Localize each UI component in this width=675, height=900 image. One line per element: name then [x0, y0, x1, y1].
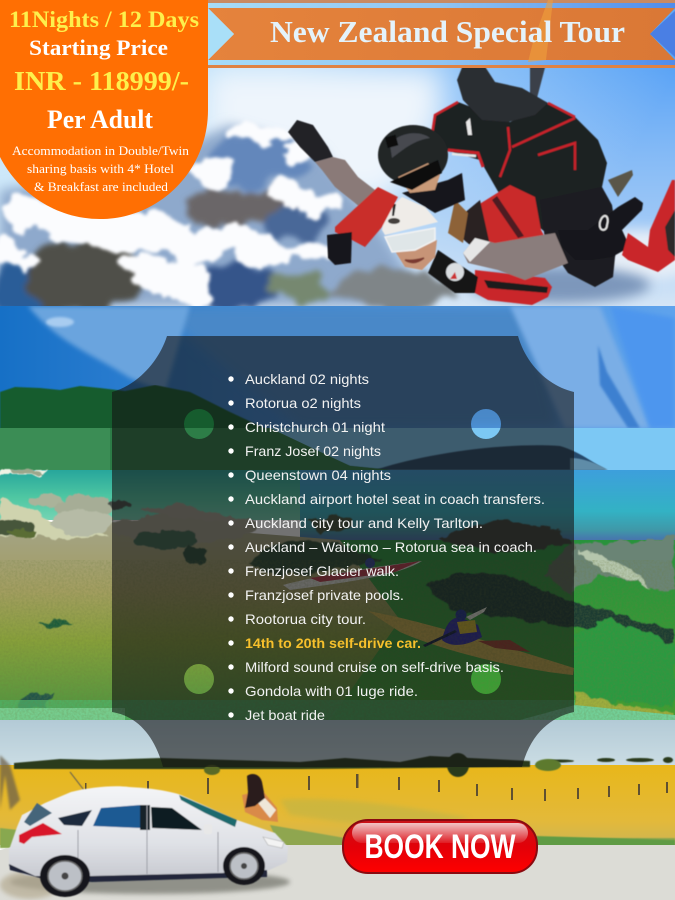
photo: blue tinted mountains — [0, 306, 675, 428]
ribbon: title banner — [208, 0, 675, 68]
list: tour itinerary: Auckland airport hotel seat in coach transfers. — [245, 491, 545, 507]
badge: price details: Per Adult — [47, 105, 153, 134]
kayak: yellow with paddler — [368, 607, 574, 675]
illustration: white hatchback car — [9, 772, 288, 897]
photo: beach with kayaks — [0, 385, 675, 720]
list: tour itinerary: Christchurch 01 night — [245, 419, 385, 435]
figure: woman sitting on the car hood — [242, 774, 278, 822]
badge: price details: 11Nights / 12 Days — [9, 7, 199, 32]
kayak: red — [283, 558, 422, 590]
list: tour itinerary: 14th to 20th self-drive car. — [245, 635, 421, 651]
badge: price details: Starting Price — [29, 35, 168, 60]
photo: skydiving sky and clouds — [0, 0, 675, 316]
list: tour itinerary: Franz Josef 02 nights — [245, 443, 381, 459]
list: tour itinerary: Gondola with 01 luge ride. — [245, 683, 418, 699]
list: tour itinerary: Frenzjosef Glacier walk. — [245, 563, 399, 579]
list: tour itinerary: Franzjosef private pools. — [245, 587, 404, 603]
list: tour itinerary: Auckland city tour and Kelly Tarlton. — [245, 515, 483, 531]
badge: price details — [0, 0, 208, 219]
badge: price details: INR - 118999/- — [14, 66, 189, 96]
title: New Zealand Special Tour — [270, 14, 625, 49]
button: book now — [343, 820, 537, 873]
button: book now: BOOK NOW — [364, 828, 516, 866]
list: tour itinerary: Rootorua city tour. — [245, 611, 366, 627]
list: tour itinerary: Queenstown 04 nights — [245, 467, 391, 483]
list: tour itinerary: Milford sound cruise on self-drive basis. — [245, 659, 504, 675]
badge: price details: & Breakfast are included — [34, 179, 169, 194]
illustration: tandem skydivers — [288, 60, 675, 305]
badge: price details: Accommodation in Double/Twin — [12, 143, 189, 158]
list: tour itinerary: Jet boat ride — [245, 707, 325, 723]
list: tour itinerary: Auckland 02 nights — [245, 371, 369, 387]
panel: dark itinerary card with notched corners — [112, 336, 574, 767]
badge: price details: sharing basis with 4* Hotel — [27, 161, 174, 176]
photo: lake, yellow field and gravel road — [0, 720, 675, 900]
list: tour itinerary — [228, 371, 545, 723]
list: tour itinerary: Rotorua o2 nights — [245, 395, 361, 411]
list: tour itinerary: Auckland – Waitomo – Rotorua sea in coach. — [245, 539, 537, 555]
